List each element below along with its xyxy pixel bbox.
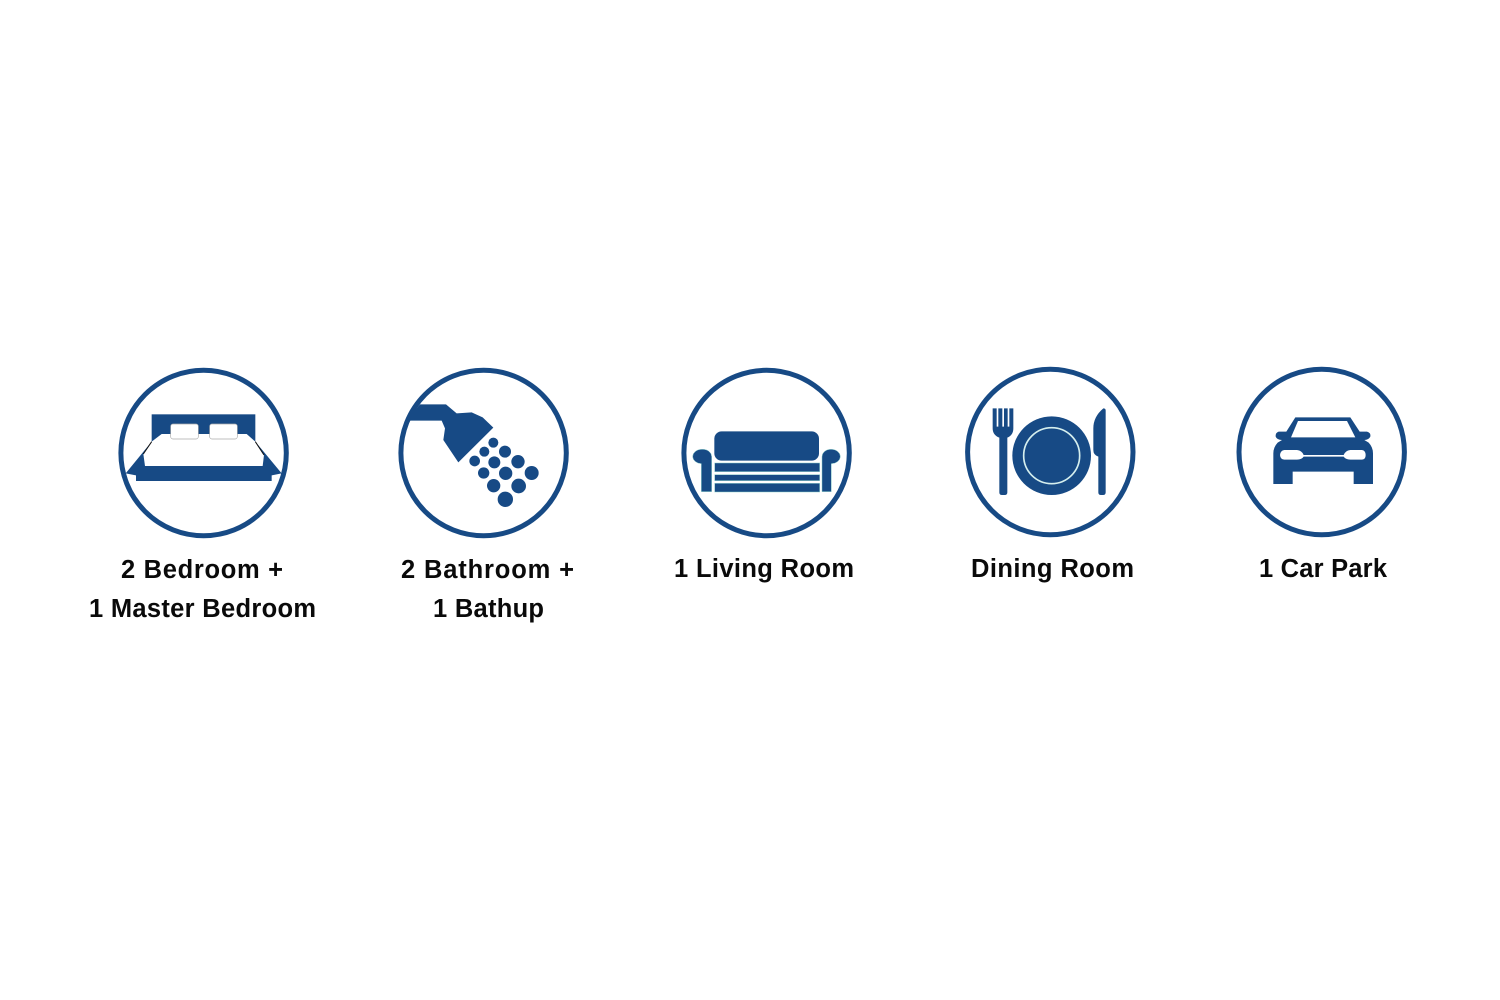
label: car park: 1 Car Park: [1259, 555, 1388, 583]
panel: bathroom: [401, 370, 574, 623]
icon: shower in circle: [401, 370, 566, 536]
icon: bed in circle: [121, 370, 286, 536]
label: dining room: Dining Room: [971, 555, 1134, 583]
label: bathroom: 2 Bathroom +: [401, 556, 574, 584]
icon: car front in circle: [1239, 369, 1404, 535]
panel: bedroom: [89, 370, 316, 623]
label: bedroom: [89, 556, 316, 623]
label: bathroom: [401, 556, 574, 623]
icon: plate and cutlery in circle: [968, 369, 1133, 535]
label: bedroom: 2 Bedroom +: [121, 556, 283, 584]
label: bedroom: 1 Master Bedroom: [89, 595, 316, 623]
icon: sofa in circle: [684, 370, 849, 536]
label: living room: 1 Living Room: [674, 555, 854, 583]
panel: car park: [1239, 369, 1404, 583]
label: bathroom: 1 Bathup: [433, 595, 544, 623]
panel: living room: [674, 370, 854, 583]
panel: dining room: [968, 369, 1134, 583]
